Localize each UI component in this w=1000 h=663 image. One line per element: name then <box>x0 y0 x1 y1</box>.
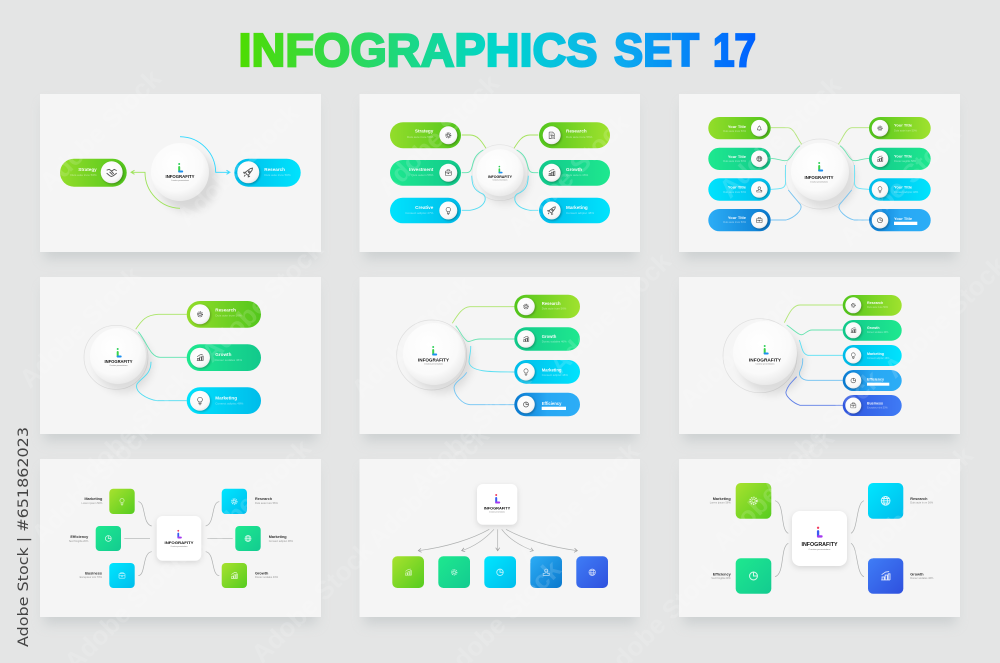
pill: growth: Growth <box>215 352 232 357</box>
pill: your title 4: Your Title <box>728 215 747 220</box>
connectors <box>784 305 843 405</box>
pill: your title 1 <box>708 117 771 139</box>
labels: Research <box>910 497 928 501</box>
central card <box>792 511 847 566</box>
central sphere: Creative presentations <box>171 179 189 182</box>
pill: research: Research <box>566 128 587 134</box>
panel: four options <box>360 277 640 434</box>
pill: your title 6 <box>869 148 931 170</box>
sphere shadow <box>797 151 855 209</box>
pill: your title 7: Your Title <box>894 185 913 190</box>
pill: efficiency <box>514 393 580 416</box>
central card: INFOGRAFITY <box>802 542 838 548</box>
sphere shadow <box>482 156 528 204</box>
labels: Sed fringilla 20% <box>711 576 731 580</box>
card: marketing globe <box>235 526 261 551</box>
pill: efficiency: Efficiency <box>542 401 562 406</box>
labels: Sed fringilla 20% <box>69 539 89 543</box>
pill: research <box>234 159 301 187</box>
pill: creative: Consect adipisc 47% <box>405 211 434 215</box>
labels: Duis aute irure 56% <box>910 500 934 504</box>
stock watermarks: Adobe Stock <box>501 108 635 242</box>
pill: strategy: Duis aute irure 56% <box>70 173 97 177</box>
pill: growth: Growth <box>542 334 557 339</box>
central sphere: Creative presentations <box>810 180 828 184</box>
connectors <box>775 501 864 577</box>
card: pie <box>484 556 516 588</box>
pill: your title 4 <box>708 209 771 231</box>
central sphere: INFOGRAFITY <box>166 174 195 179</box>
pill: efficiency <box>843 370 902 391</box>
pill: growth: Growth <box>566 167 582 172</box>
card: growth chart <box>392 556 424 588</box>
pill: research <box>539 122 610 148</box>
panel: five options <box>679 277 960 434</box>
panel: eight-option circle <box>679 94 960 252</box>
card: marketing bulb <box>109 489 135 514</box>
labels: Growth <box>255 572 269 576</box>
pill: your title 2: Duis aute irure 50% <box>723 159 747 163</box>
pill: research: Research <box>264 167 285 172</box>
pill: your title 3 <box>708 178 771 201</box>
pill: strategy: Strategy <box>78 167 97 172</box>
labels: Research <box>255 497 273 501</box>
stock watermarks: Adobe Stock <box>345 270 479 404</box>
pill: marketing: Consect adipisc 48% <box>867 357 890 360</box>
labels: Consect adipisc 48% <box>269 539 294 543</box>
labels: Duis aute irure 56% <box>255 501 278 505</box>
pill: growth <box>514 327 580 351</box>
central card: Creative presentations <box>489 510 505 514</box>
pill: investment <box>390 160 461 186</box>
pill: marketing <box>187 387 261 414</box>
pill: your title 7 <box>869 178 931 201</box>
pill: marketing <box>514 360 580 384</box>
central sphere: INFOGRAFITY <box>804 175 834 180</box>
labels: Efficiency <box>70 535 89 539</box>
pill: research: Research <box>542 301 561 306</box>
pill: strategy <box>390 122 461 148</box>
sphere ring <box>472 145 528 201</box>
pill: marketing: Marketing <box>867 352 884 356</box>
pill: research: Duis aute irure 56% <box>215 314 242 318</box>
sphere ring <box>397 320 467 390</box>
stock watermarks: Adobe Stock <box>371 68 505 202</box>
labels <box>69 497 294 579</box>
pill: research <box>187 301 261 328</box>
stock watermarks: Adobe Stock <box>183 433 317 567</box>
sphere shadow <box>740 330 804 394</box>
pill: investment: Quis autem 56% <box>411 173 434 177</box>
stock watermarks: Adobe Stock <box>403 364 537 498</box>
pill: your title 5 <box>869 117 931 139</box>
stock watermarks: Adobe Stock <box>511 436 645 570</box>
central sphere <box>733 321 797 385</box>
pill: your title 3: Duis aute irure 50% <box>723 190 747 194</box>
pill: creative: Creative <box>415 205 434 210</box>
stock watermarks: Adobe Stock <box>845 440 979 574</box>
pill: your title 7: Consect adipisc 48% <box>894 190 919 194</box>
pill: marketing: Consect adipisc 48% <box>566 211 594 215</box>
central sphere: Creative presentations <box>756 362 775 366</box>
pill: research: Duis aute irure 56% <box>867 306 889 309</box>
pill: your title 2 <box>708 148 771 170</box>
panel: five squares tree <box>360 459 640 617</box>
stock watermarks: Adobe Stock <box>753 364 887 498</box>
central sphere: INFOGRAFITY <box>488 175 513 179</box>
card: growth chart <box>868 558 903 594</box>
card: efficiency pie <box>96 526 121 551</box>
pill: your title 6: Donec sagittis 58% <box>894 159 917 163</box>
pill: growth: Donec sodales 46% <box>867 331 889 334</box>
pill: creative <box>390 198 461 223</box>
pill: marketing <box>539 198 610 223</box>
sphere ring <box>84 325 148 389</box>
card: efficiency pie <box>736 558 771 594</box>
sphere ring <box>785 139 855 209</box>
pill: your title 2: Your Title <box>728 154 747 159</box>
stock watermarks: Adobe Stock <box>673 280 807 414</box>
stock watermarks: Adobe Stock <box>833 118 967 252</box>
labels: Donec sodales 46% <box>255 575 279 579</box>
pill: strategy: Strategy <box>415 128 434 134</box>
pill: your title 1: Duis aute irure 50% <box>723 129 747 133</box>
labels: Marketing <box>84 497 103 501</box>
stock watermarks: Adobe Stock <box>543 246 677 380</box>
pill: your title 5: Your Title <box>894 122 913 128</box>
central card: INFOGRAFITY <box>484 506 511 510</box>
labels: Business <box>85 572 102 576</box>
pill: your title 5: Duis aute irure 50% <box>894 128 917 132</box>
panel shadows <box>44 104 956 624</box>
title <box>238 24 756 76</box>
stock watermarks: Adobe Stock <box>13 260 147 394</box>
stock watermarks: Adobe Stock <box>361 420 495 554</box>
connectors <box>462 135 538 210</box>
labels: Marketing <box>269 535 287 539</box>
pill: strategy: Duis aute irure 56% <box>407 135 434 139</box>
stock watermarks: Adobe Stock <box>195 234 329 368</box>
pill: research <box>514 295 580 318</box>
central sphere <box>151 143 209 201</box>
central sphere: INFOGRAFITY <box>418 358 449 362</box>
pill: your title 3: Your Title <box>728 184 747 190</box>
sphere shadow <box>410 331 472 393</box>
central card: Creative presentations <box>809 548 831 551</box>
panel: two-option circle <box>40 94 321 252</box>
pill: research: Research <box>215 307 236 312</box>
panel: six squares <box>40 459 321 617</box>
central sphere: INFOGRAFITY <box>104 359 133 364</box>
pill: growth: Growth <box>867 326 880 330</box>
panel: six-option circle <box>360 94 640 252</box>
pill: your title 1: Your Title <box>728 124 747 129</box>
vertical stock id: Adobe Stock | #651862023 <box>16 427 32 647</box>
sphere shadow <box>96 336 152 392</box>
title: 17 <box>713 24 756 76</box>
central sphere: Creative presentations <box>110 364 128 367</box>
pill: business: Excepteur sint 50% <box>867 406 888 410</box>
sphere shadow <box>159 153 217 211</box>
central card <box>477 484 517 525</box>
pill: your title 4: Duis aute irure 50% <box>723 220 747 224</box>
panel: three options <box>40 277 321 434</box>
pill: marketing: Consect adipisc 48% <box>542 373 568 377</box>
pill: growth <box>539 160 610 186</box>
pill: marketing <box>843 345 902 366</box>
pill: growth <box>187 344 261 371</box>
card: marketing gear <box>736 483 771 519</box>
central sphere <box>476 149 524 196</box>
title: SET <box>614 24 699 76</box>
connectors <box>136 314 187 401</box>
pill: growth: Donec sodales 46% <box>542 340 567 344</box>
pill: marketing: Marketing <box>215 395 237 400</box>
central card <box>157 516 201 561</box>
labels: Marketing <box>713 497 731 501</box>
labels: Excepteur sint 70% <box>80 575 103 579</box>
pill: research: Research <box>867 301 883 305</box>
card: person <box>530 556 562 588</box>
pill: growth: Donec sodales 46% <box>215 358 242 362</box>
pill: your title 8 <box>869 209 931 231</box>
connectors <box>452 307 514 405</box>
pill: efficiency: Efficiency <box>867 378 884 382</box>
stock watermarks: Adobe Stock <box>706 423 840 557</box>
pill: marketing: Marketing <box>566 205 588 210</box>
pill: marketing: Marketing <box>542 368 562 372</box>
pill: growth: Quis autem 46% <box>566 173 589 177</box>
labels: Lorem ipsum 56% <box>81 501 103 505</box>
labels: Lorem ipsum 56% <box>710 500 731 504</box>
central sphere: Creative presentations <box>424 362 443 366</box>
stock watermarks: Adobe Stock <box>63 364 197 498</box>
stock watermarks: Adobe Stock <box>25 415 159 549</box>
stock watermarks: Adobe Stock <box>713 70 847 204</box>
central sphere <box>403 323 465 385</box>
card: growth chart <box>222 563 247 588</box>
connectors <box>771 128 869 220</box>
central sphere: INFOGRAFITY <box>749 358 781 362</box>
pill: research: Duis aute irure 56% <box>542 306 567 310</box>
pill: research <box>843 295 902 316</box>
pill: research: Duis aute irure 56% <box>566 135 593 139</box>
connectors <box>124 502 233 576</box>
title: INFOGRAPHICS <box>238 24 598 76</box>
arrow: to research <box>180 137 230 174</box>
pill: research: Duis aute irure 56% <box>264 173 291 177</box>
pill: business <box>843 395 902 416</box>
pill: business: Business <box>867 402 883 406</box>
pill: your title 6: Your Title <box>894 154 913 158</box>
central card: Creative presentations <box>171 545 188 548</box>
panel: four squares <box>679 459 960 617</box>
stock watermarks: Adobe Stock <box>171 98 305 232</box>
labels: Growth <box>910 572 924 576</box>
labels <box>710 497 934 580</box>
card: research globe <box>868 483 903 519</box>
pill: your title 8: Your Title <box>894 216 913 221</box>
stock watermarks: Adobe Stock <box>33 63 167 197</box>
arrows <box>418 529 577 551</box>
pill: marketing: Consect adipisc 48% <box>215 402 244 406</box>
card: research gear <box>222 489 247 514</box>
labels: Efficiency <box>713 572 732 576</box>
pill: strategy <box>60 159 127 187</box>
central sphere <box>791 143 849 201</box>
card: business case <box>109 563 135 588</box>
pill: investment: Investment <box>409 167 434 172</box>
labels: Donec sodales 46% <box>910 576 934 580</box>
central sphere <box>90 328 146 384</box>
sphere ring <box>723 319 797 393</box>
arrow: to strategy <box>131 170 180 208</box>
pill: growth <box>843 320 902 341</box>
card: gear <box>438 556 470 588</box>
card: globe <box>576 556 608 588</box>
central sphere: Creative presentations <box>492 178 508 182</box>
central card: INFOGRAFITY <box>164 540 194 545</box>
